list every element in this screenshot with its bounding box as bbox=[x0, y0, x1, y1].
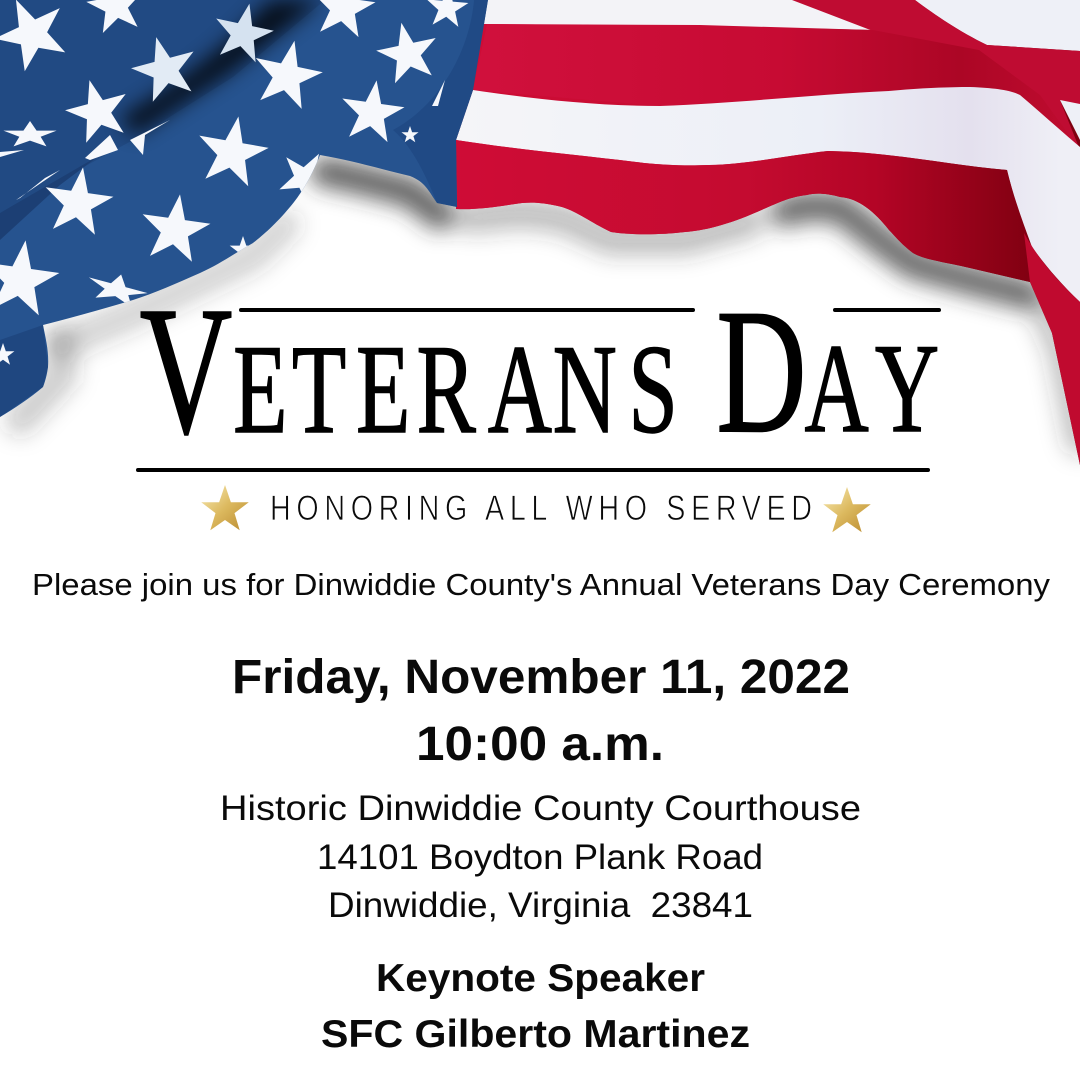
date: Friday, November 11, 2022 bbox=[232, 651, 850, 704]
location bbox=[220, 788, 861, 925]
word: Day: AY bbox=[805, 318, 939, 459]
keynote speaker bbox=[321, 957, 750, 1056]
word: Veterans: ETERANS bbox=[233, 319, 678, 460]
lower red stripe bbox=[440, 140, 1032, 290]
top white stripe bbox=[484, 0, 870, 30]
American flag bbox=[0, 0, 1080, 480]
white sliver right bbox=[1060, 100, 1080, 140]
title rule: bottom bbox=[136, 468, 930, 472]
flag: stripes bbox=[440, 0, 1080, 480]
flag: blue canton bbox=[0, 0, 490, 430]
street address: 14101 Boydton Plank Road bbox=[317, 837, 763, 877]
middle white stripe bbox=[456, 87, 1080, 302]
title rule: top left bbox=[239, 308, 695, 312]
date and time bbox=[232, 651, 850, 771]
city, state, zip: Dinwiddie, Virginia 23841 bbox=[328, 885, 753, 925]
time: 10:00 a.m. bbox=[416, 718, 664, 771]
subtitle with gold stars bbox=[201, 485, 871, 532]
venue: Historic Dinwiddie County Courthouse bbox=[220, 788, 861, 828]
flag drop shadow bbox=[20, 172, 1080, 440]
word: Day: D bbox=[716, 273, 806, 470]
right red edge bbox=[1024, 233, 1080, 480]
icon: gold star left bbox=[201, 485, 249, 530]
second red stripe bbox=[489, 24, 1073, 141]
top right white stripe bbox=[915, 0, 1080, 51]
title: Veterans Day bbox=[136, 270, 941, 473]
subtitle: HONORING ALL WHO SERVED bbox=[270, 488, 812, 528]
speaker name: SFC Gilberto Martinez bbox=[321, 1013, 750, 1056]
title rule: top right bbox=[833, 308, 941, 312]
diagonal red stripe bbox=[792, 0, 1080, 150]
invitation line: Please join us for Dinwiddie County's Annual Veterans Day Ceremony bbox=[32, 567, 1051, 602]
keynote label: Keynote Speaker bbox=[376, 957, 705, 1000]
word: Veterans: V bbox=[140, 270, 232, 473]
icon: gold star right bbox=[823, 487, 871, 532]
flag: stars bbox=[0, 0, 470, 365]
